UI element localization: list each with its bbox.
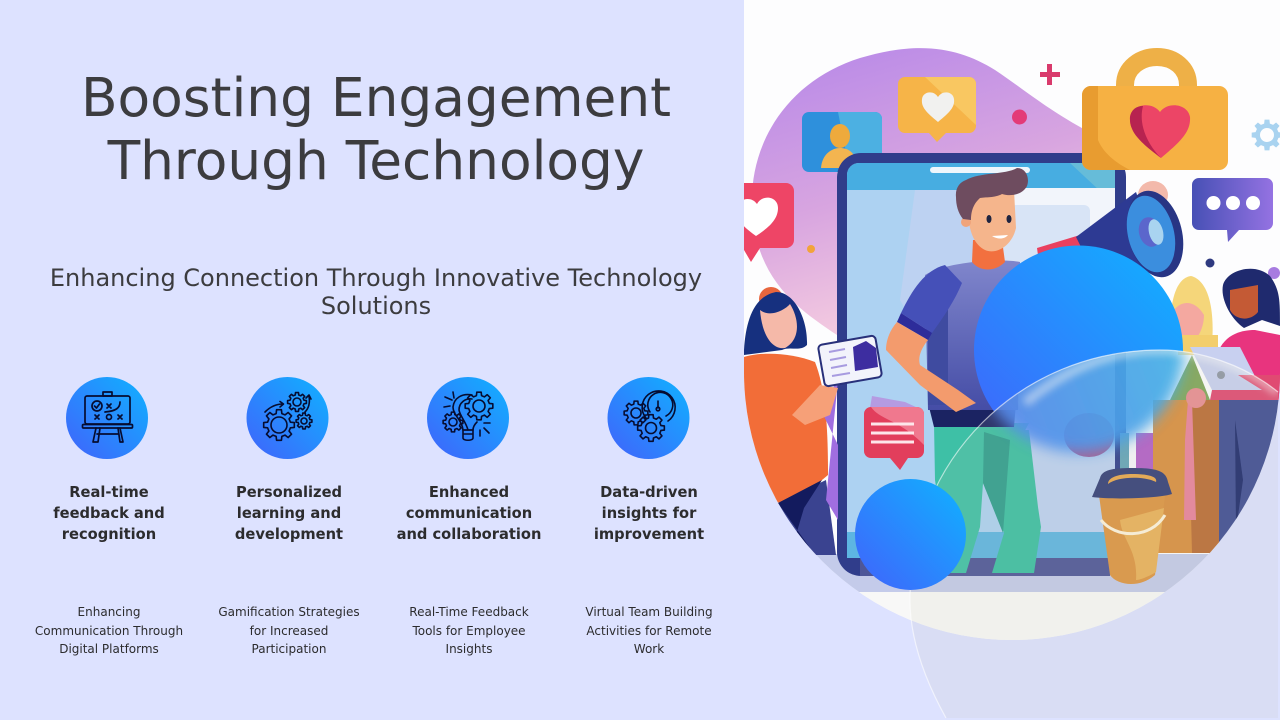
description: virtual team building: Virtual Team Building bbox=[585, 605, 713, 619]
icon: gears with arrows bbox=[246, 377, 328, 459]
description: virtual team building: Activities for Remote bbox=[586, 624, 712, 638]
background people and coat bbox=[1120, 400, 1280, 553]
heading: real-time feedback: Real-time bbox=[69, 484, 149, 501]
glass panel bbox=[988, 350, 1278, 462]
man body and legs bbox=[886, 261, 1041, 573]
illustration bbox=[744, 0, 1280, 640]
man head bbox=[956, 168, 1028, 270]
floor bbox=[816, 554, 1208, 592]
description: gamification bbox=[218, 605, 360, 656]
icon: light bulb with gears bbox=[427, 377, 509, 459]
description: digital platforms: Communication Through bbox=[35, 624, 183, 638]
heading: data-driven insights bbox=[594, 484, 704, 543]
description: real-time tools bbox=[409, 605, 529, 656]
title bbox=[81, 66, 671, 192]
small blue circle bbox=[855, 479, 966, 590]
description: digital platforms: Enhancing bbox=[78, 605, 140, 619]
cup bbox=[1092, 468, 1172, 584]
left panel background bbox=[0, 0, 744, 720]
heading: personalized learning: Personalized bbox=[236, 484, 342, 501]
icon: user card bbox=[802, 112, 882, 172]
description: virtual team building: Work bbox=[634, 642, 664, 656]
pink shape beneath the blurred circle bbox=[1064, 413, 1114, 457]
description: virtual team building bbox=[585, 605, 713, 656]
description: gamification: Participation bbox=[252, 642, 326, 656]
heading: personalized learning: learning and bbox=[237, 505, 341, 522]
person: left woman bbox=[744, 287, 838, 555]
decor: plus and dots bbox=[807, 64, 1280, 279]
large blue circle, sharp part bbox=[974, 246, 1183, 412]
description: gamification: for Increased bbox=[250, 624, 328, 638]
person: woman in pink bbox=[1216, 269, 1280, 400]
heading: real-time feedback bbox=[53, 484, 165, 543]
heading: personalized learning bbox=[235, 484, 343, 543]
card held by woman bbox=[818, 335, 882, 387]
chat bubble with dots bbox=[1192, 178, 1273, 242]
icon: gears with gauge bbox=[608, 377, 690, 459]
lock with heart bbox=[1082, 57, 1228, 170]
title: Boosting Engagement bbox=[81, 66, 671, 129]
title: Through Technology bbox=[108, 129, 644, 192]
heading: enhanced communication: communication bbox=[406, 505, 532, 522]
description: digital platforms bbox=[35, 605, 183, 656]
heading: personalized learning: development bbox=[235, 526, 343, 543]
description: real-time tools: Insights bbox=[446, 642, 492, 656]
heading: real-time feedback: recognition bbox=[62, 526, 156, 543]
purple blob bbox=[752, 48, 1100, 335]
heading: data-driven insights: improvement bbox=[594, 526, 704, 543]
description: digital platforms: Digital Platforms bbox=[59, 642, 159, 656]
heading: enhanced communication: Enhanced bbox=[429, 484, 509, 501]
speech bubble: red note bbox=[864, 396, 924, 470]
description: real-time tools: Tools for Employee bbox=[412, 624, 526, 638]
laptop bbox=[1170, 347, 1280, 408]
heading: data-driven insights: insights for bbox=[602, 505, 696, 522]
person: blonde woman bbox=[1170, 276, 1218, 355]
phone bbox=[837, 153, 1126, 576]
icon: presentation board bbox=[66, 377, 148, 459]
speech bubble: red heart bbox=[744, 183, 794, 262]
heading: enhanced communication: and collaboration bbox=[397, 526, 541, 543]
speech bubble: yellow heart bbox=[898, 77, 976, 142]
heading: real-time feedback: feedback and bbox=[53, 505, 165, 522]
megaphone bbox=[1037, 181, 1184, 278]
heading: enhanced communication bbox=[397, 484, 541, 543]
description: gamification: Gamification Strategies bbox=[218, 605, 360, 619]
subtitle: Enhancing Connection Through Innovative Technology Solutions bbox=[50, 264, 702, 320]
description: real-time tools: Real-Time Feedback bbox=[409, 605, 529, 619]
heading: data-driven insights: Data-driven bbox=[600, 484, 698, 501]
glass panel tint bbox=[910, 349, 1278, 718]
